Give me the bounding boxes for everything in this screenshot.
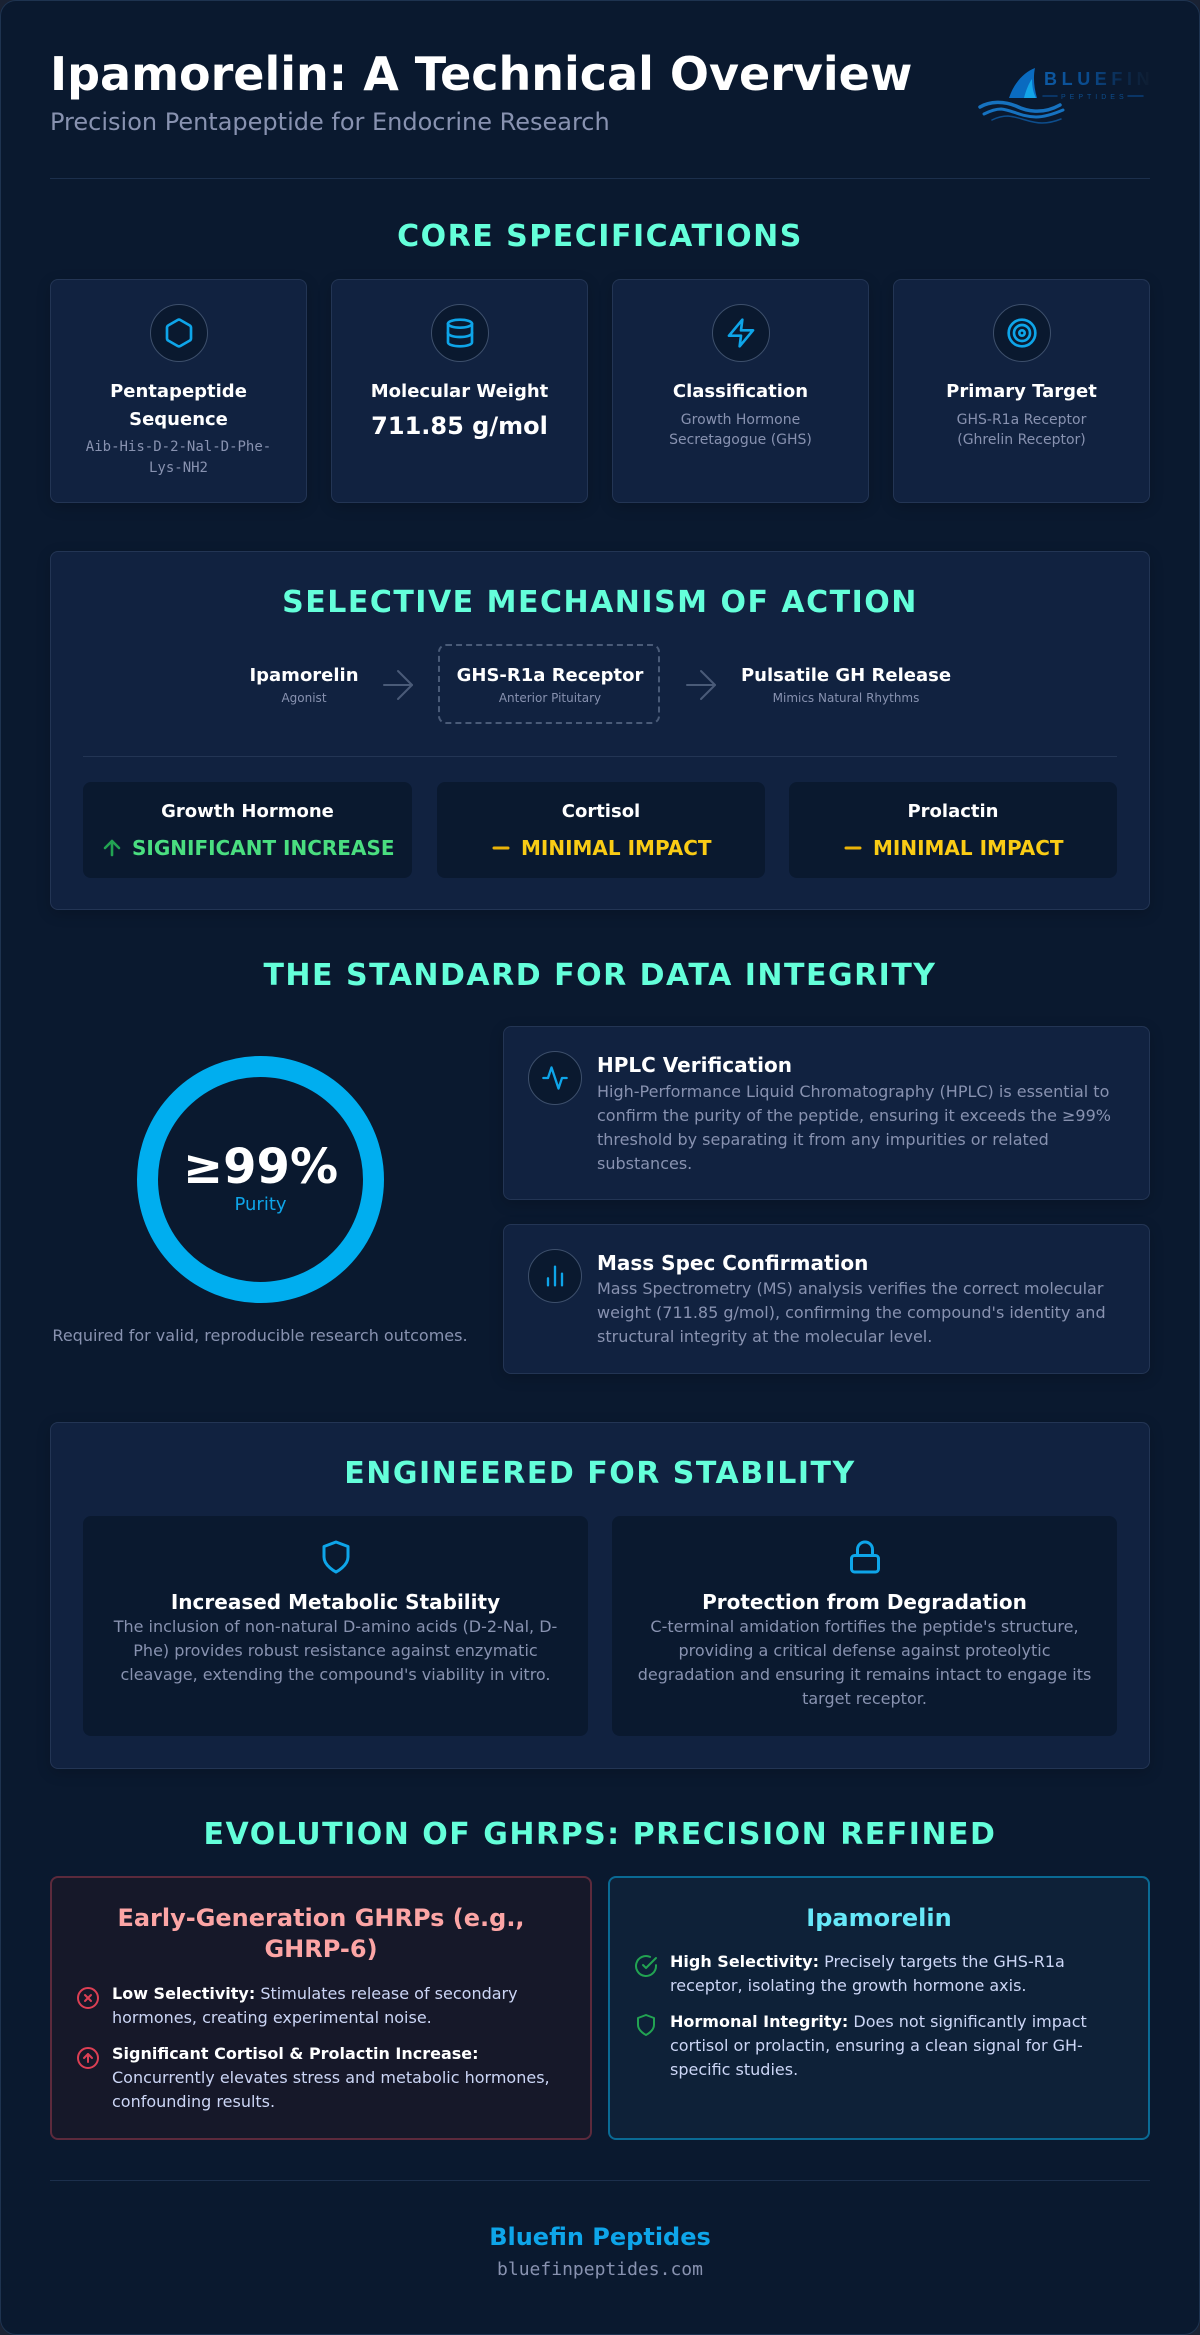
purity value: ≥99%	[183, 1139, 338, 1195]
section heading: core specifications: CORE SPECIFICATIONS	[397, 219, 803, 254]
value: 711.85 g/mol	[371, 412, 548, 440]
value: Secretagogue (GHS)	[669, 432, 812, 448]
body	[638, 1617, 1091, 1708]
body: threshold by separating it from any impurities or related	[597, 1130, 1049, 1149]
list item: low selectivity	[77, 1984, 518, 2027]
card: molecular weight	[331, 279, 588, 503]
list item: low selectivity: Low Selectivity: Stimulates release of secondary	[112, 1984, 518, 2003]
arrow	[383, 670, 413, 700]
body	[597, 1279, 1106, 1346]
flow: GHS-R1a receptor: Anterior Pituitary	[499, 691, 601, 705]
body: Phe) provides robust resistance against enzymatic	[133, 1641, 538, 1660]
body: Mass Spectrometry (MS) analysis verifies the correct molecular	[597, 1279, 1103, 1298]
hormone card: growth hormone: Growth Hormone	[161, 801, 334, 822]
flow: GHS-R1a receptor	[438, 644, 660, 724]
sub card: metabolic stability	[83, 1516, 588, 1736]
hormone card: growth hormone: SIGNIFICANT INCREASE	[132, 836, 395, 860]
card: classification	[612, 279, 869, 503]
icon: arrow up	[104, 840, 120, 856]
icon: hexagon	[150, 304, 208, 362]
logo: Bluefin Peptides: BLUEFIN	[1044, 69, 1151, 89]
list item: cortisol and prolactin increase: Significant Cortisol & Prolactin Increase:	[112, 2044, 479, 2063]
value: Growth Hormone	[681, 412, 800, 428]
list item: cortisol and prolactin increase: confounding results.	[112, 2092, 275, 2111]
icon: shield	[637, 2014, 655, 2036]
icon: arrow up circle	[77, 2047, 99, 2069]
icon: lock	[850, 1540, 880, 1574]
list item: hormonal integrity: cortisol or prolactin, ensuring a clean signal for GH-	[670, 2036, 1083, 2055]
section heading: data integrity: THE STANDARD FOR DATA INTEGRITY	[263, 958, 937, 993]
hormone card: cortisol: Cortisol	[562, 801, 640, 822]
body	[114, 1617, 557, 1684]
body: C-terminal amidation fortifies the peptide's structure,	[650, 1617, 1079, 1636]
list item: hormonal integrity: Hormonal Integrity: Does not significantly impact	[670, 2012, 1087, 2031]
value	[957, 412, 1086, 448]
flow: Ipamorelin: Agonist	[281, 691, 327, 705]
value: Aib-His-D-2-Nal-D-Phe-	[86, 439, 271, 455]
flow: pulsatile GH release: Pulsatile GH Release	[741, 665, 951, 686]
flow: GHS-R1a receptor: GHS-R1a Receptor	[457, 665, 643, 686]
icon: check circle	[635, 1955, 657, 1977]
header title: Ipamorelin: A Technical Overview	[50, 47, 912, 101]
body: structural integrity at the molecular level.	[597, 1327, 932, 1346]
section heading: SELECTIVE MECHANISM OF ACTION	[282, 585, 918, 620]
hormone card: cortisol	[437, 782, 765, 878]
logo: Bluefin Peptides: PEPTIDES	[1061, 94, 1128, 101]
flow: Ipamorelin	[249, 665, 359, 705]
list item: hormonal integrity: specific studies.	[670, 2060, 798, 2079]
body: degradation and ensuring it remains intact to engage its	[638, 1665, 1091, 1684]
ring caption: Required for valid, reproducible research outcomes.	[52, 1326, 468, 1345]
panel: engineered for stability	[50, 1422, 1150, 1769]
footer brand: Bluefin Peptides	[489, 2223, 711, 2251]
body	[597, 1082, 1111, 1173]
panel: early-generation GHRPs	[50, 1876, 592, 2140]
body: weight (711.85 g/mol), confirming the compound's identity and	[597, 1303, 1106, 1322]
list item: high selectivity	[635, 1952, 1065, 1995]
section heading: ENGINEERED FOR STABILITY	[344, 1456, 856, 1491]
icon: minus	[492, 846, 510, 850]
panel: Ipamorelin advantages	[608, 1876, 1150, 2140]
list item: low selectivity: hormones, creating experimental noise.	[112, 2008, 432, 2027]
divider	[83, 756, 1117, 757]
card: mass spec confirmation	[503, 1224, 1150, 1374]
hormone card: cortisol: MINIMAL IMPACT	[521, 836, 712, 860]
body: substances.	[597, 1154, 692, 1173]
logo: Bluefin Peptides	[978, 68, 1151, 124]
hormone card: prolactin: MINIMAL IMPACT	[873, 836, 1064, 860]
body: providing a critical defense against proteolytic	[678, 1641, 1051, 1660]
heading: Mass Spec Confirmation	[597, 1251, 868, 1275]
list item: high selectivity: High Selectivity: Precisely targets the GHS-R1a	[670, 1952, 1065, 1971]
label: Pentapeptide	[110, 381, 247, 402]
heading: Ipamorelin	[806, 1904, 952, 1932]
purity label: Purity	[234, 1194, 287, 1215]
hormone card: prolactin: Prolactin	[907, 801, 998, 822]
icon: minus	[844, 846, 862, 850]
label: Classification	[673, 381, 808, 402]
value	[669, 412, 812, 448]
icon: activity	[528, 1051, 582, 1105]
value	[86, 439, 271, 476]
label: Primary Target	[946, 381, 1097, 402]
body: target receptor.	[802, 1689, 927, 1708]
body: confirm the purity of the peptide, ensuring it exceeds the ≥99%	[597, 1106, 1111, 1125]
icon: zap	[712, 304, 770, 362]
sub card: protection from degradation	[612, 1516, 1117, 1736]
panel: selective mechanism of action	[50, 551, 1150, 910]
hormone card: prolactin	[789, 782, 1117, 878]
card: primary target	[893, 279, 1150, 503]
heading	[117, 1904, 525, 1963]
divider	[50, 2180, 1150, 2181]
list item: hormonal integrity	[637, 2012, 1087, 2079]
divider	[50, 178, 1150, 179]
heading: Early-Generation GHRPs (e.g.,	[117, 1904, 525, 1932]
arrow	[686, 670, 716, 700]
heading: GHRP-6)	[264, 1935, 378, 1963]
icon: bar chart	[528, 1249, 582, 1303]
body: cleavage, extending the compound's viability in vitro.	[120, 1665, 551, 1684]
flow: Ipamorelin: Ipamorelin	[249, 665, 359, 686]
list item: high selectivity: receptor, isolating the growth hormone axis.	[670, 1976, 1027, 1995]
card: pentapeptide sequence	[50, 279, 307, 503]
icon: shield	[322, 1540, 350, 1574]
icon: target	[993, 304, 1051, 362]
flow: pulsatile GH release	[741, 665, 951, 705]
header subtitle: Precision Pentapeptide for Endocrine Research	[50, 108, 610, 136]
card: HPLC verification	[503, 1026, 1150, 1200]
heading: Increased Metabolic Stability	[171, 1590, 500, 1614]
value: (Ghrelin Receptor)	[957, 432, 1086, 448]
chart: purity ring	[137, 1056, 384, 1303]
icon: x circle	[77, 1987, 99, 2009]
panel: core specifications	[50, 279, 1150, 503]
body: The inclusion of non-natural D-amino acids (D-2-Nal, D-	[114, 1617, 557, 1636]
footer url: bluefinpeptides.com	[497, 2259, 703, 2280]
label: Molecular Weight	[371, 381, 548, 402]
label: Sequence	[129, 409, 228, 430]
flow: pulsatile GH release: Mimics Natural Rhythms	[773, 691, 919, 705]
body: High-Performance Liquid Chromatography (HPLC) is essential to	[597, 1082, 1109, 1101]
list item: cortisol and prolactin increase: Concurrently elevates stress and metabolic hormones,	[112, 2068, 550, 2087]
heading: Protection from Degradation	[702, 1590, 1027, 1614]
value: Lys-NH2	[149, 460, 208, 476]
label	[110, 381, 247, 430]
heading: HPLC Verification	[597, 1053, 792, 1077]
section heading: evolution of GHRPs: EVOLUTION OF GHRPS: PRECISION REFINED	[204, 1817, 996, 1852]
list item: cortisol and prolactin increase	[77, 2044, 550, 2111]
value: GHS-R1a Receptor	[957, 412, 1086, 428]
icon: database	[431, 304, 489, 362]
hormone card: growth hormone	[83, 782, 412, 878]
